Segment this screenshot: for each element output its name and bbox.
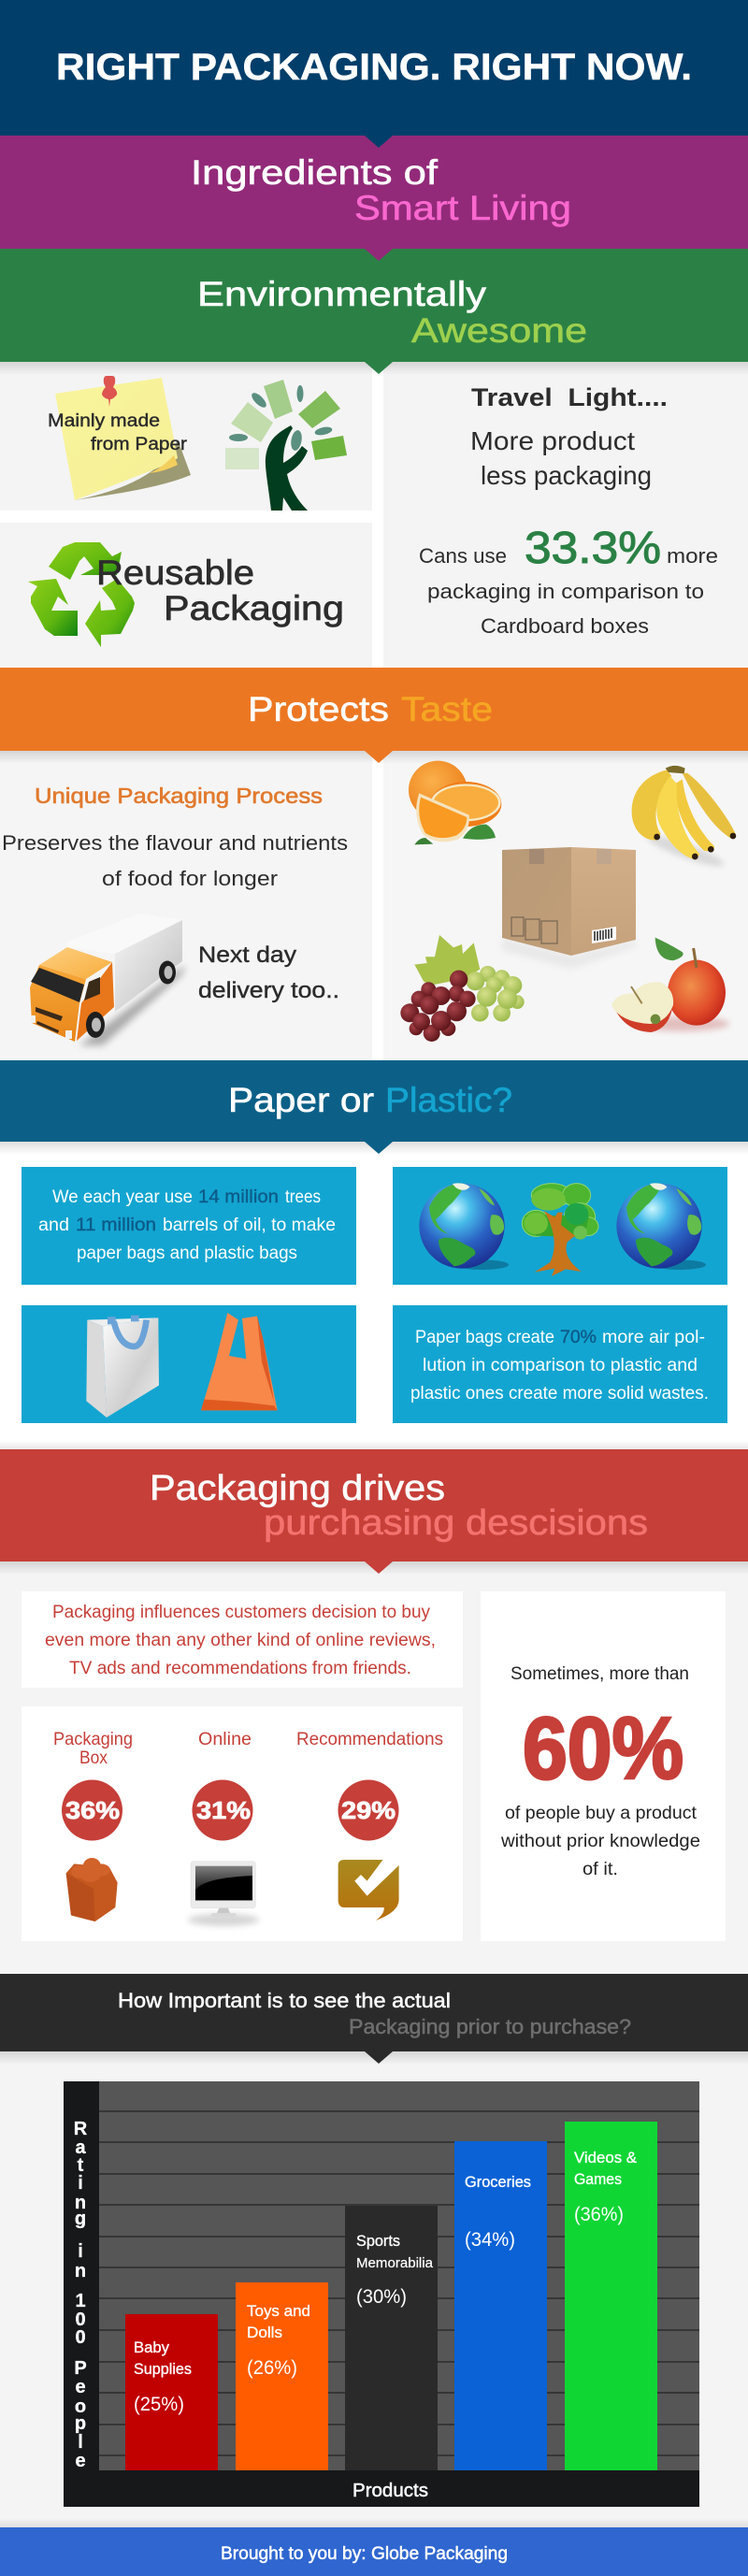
text: cans statistic: Cans use xyxy=(419,544,507,568)
text: next day delivery: Next day xyxy=(198,943,296,968)
arrow: red xyxy=(365,1561,393,1574)
y axis label: t xyxy=(78,2155,84,2176)
heading line 1: Ingredients of xyxy=(191,153,439,192)
bar: sports memorabilia xyxy=(345,2206,438,2470)
bar: baby supplies: Supplies xyxy=(134,2360,192,2378)
y axis label: p xyxy=(75,2413,86,2434)
x axis label: Products xyxy=(352,2481,428,2501)
bar: videos and games: (36%) xyxy=(574,2204,624,2225)
text: next day delivery: delivery too.. xyxy=(198,978,339,1003)
banner: how important xyxy=(0,1974,748,2051)
text: cans statistic: more xyxy=(667,544,718,568)
title: RIGHT PACKAGING. RIGHT NOW. xyxy=(56,47,692,88)
icon: bananas xyxy=(632,766,736,871)
icon: delivery truck xyxy=(30,914,185,1045)
text: preserves flavour xyxy=(2,831,348,890)
label: online: Online xyxy=(198,1730,252,1749)
panel: trees and oil: paper bags and plastic bags xyxy=(77,1244,297,1263)
y axis label: l xyxy=(78,2432,83,2453)
y axis label: n xyxy=(75,2193,86,2213)
text: cans statistic xyxy=(419,524,718,638)
heading word 2: Taste xyxy=(401,690,493,728)
text: more product less packaging xyxy=(470,426,652,490)
panel: influence text: Packaging influences customers decision to buy xyxy=(52,1603,430,1622)
stat: 36% xyxy=(62,1780,122,1840)
icon: globe right xyxy=(616,1183,706,1270)
panel: air pollution: plastic ones create more solid wastes. xyxy=(410,1384,709,1403)
panel: influence text: TV ads and recommendations from friends. xyxy=(69,1659,411,1678)
bar: groceries: Groceries xyxy=(465,2173,531,2191)
bar: toys and dolls: Dolls xyxy=(247,2324,282,2341)
bar: videos and games: Videos & xyxy=(574,2149,638,2166)
panel: 60 percent callout xyxy=(481,1591,726,1941)
y axis label: 0 xyxy=(75,2310,86,2330)
stat: 31% xyxy=(193,1780,252,1840)
icon: apples xyxy=(611,938,729,1032)
panel: 60 percent callout: Sometimes, more than xyxy=(511,1664,689,1684)
y axis label: 0 xyxy=(75,2327,86,2348)
footer: Brought to you by: Globe Packaging xyxy=(221,2544,508,2564)
panel: 60 percent callout: of people buy a product xyxy=(505,1804,698,1823)
text: more product less packaging: More product xyxy=(470,426,635,455)
icon: recycling arrows xyxy=(28,542,135,647)
icon: monitor xyxy=(188,1862,259,1926)
panel: trees and oil: We each year use xyxy=(52,1187,193,1207)
heading line 2: purchasing descisions xyxy=(264,1504,648,1543)
footer xyxy=(0,2527,748,2576)
panel: evergreen left top xyxy=(0,362,372,511)
text: unique packaging process: Unique Packaging Process xyxy=(35,784,323,808)
panel: air pollution: Paper bags create xyxy=(415,1328,554,1347)
text: reusable packaging: Reusable xyxy=(96,554,254,592)
icon: globe left xyxy=(419,1183,509,1270)
bar: sports memorabilia: Sports xyxy=(356,2232,400,2250)
y axis label: e xyxy=(75,2377,86,2397)
y axis label: R xyxy=(74,2119,88,2139)
panel: trees and oil: barrels of oil, to make xyxy=(163,1216,336,1235)
y axis label: P xyxy=(74,2358,87,2379)
heading line 2: Smart Living xyxy=(354,189,571,227)
panel: air pollution: lution in comparison to plastic and xyxy=(423,1356,698,1375)
text: mainly made from paper: from Paper xyxy=(91,435,188,454)
bar: toys and dolls xyxy=(236,2282,328,2470)
bar chart xyxy=(64,2081,699,2507)
number: 33.3%: 33.3% xyxy=(525,524,661,573)
banner: environmentally awesome xyxy=(0,249,748,362)
highlight: 70%: 70% xyxy=(560,1328,597,1347)
label: packaging box xyxy=(53,1730,133,1768)
panel: bags xyxy=(22,1305,356,1423)
y axis label: g xyxy=(75,2209,86,2229)
panel: influence percentages xyxy=(22,1706,463,1941)
stat: 31%: 31% xyxy=(196,1796,251,1824)
heading word 1: Paper or xyxy=(228,1081,374,1119)
panel: taste left xyxy=(0,751,372,1060)
icon: oranges xyxy=(409,761,501,844)
banner: protects taste xyxy=(0,668,748,751)
panel: travel light xyxy=(383,362,748,668)
stat: 36%: 36% xyxy=(65,1796,120,1824)
text: mainly made from paper: Mainly made xyxy=(48,411,160,431)
heading line 1: How Important is to see the actual xyxy=(118,1989,451,2012)
bar: groceries: (34%) xyxy=(465,2229,515,2251)
panel: influence text xyxy=(22,1591,463,1688)
label: packaging box: Packaging xyxy=(53,1730,133,1749)
stat: 29%: 29% xyxy=(341,1796,396,1824)
bar: baby supplies: Baby xyxy=(134,2339,169,2356)
text: more product less packaging: less packaging xyxy=(481,461,652,490)
bar: baby supplies xyxy=(125,2314,218,2470)
text: preserves flavour: of food for longer xyxy=(102,867,278,890)
panel: air pollution: more air pol- xyxy=(602,1328,705,1347)
highlight: 14 million: 14 million xyxy=(198,1187,279,1207)
panel: trees and oil: and xyxy=(38,1216,69,1235)
icon: grapes xyxy=(400,935,525,1042)
y axis label: i xyxy=(78,2173,83,2194)
bar: baby supplies: (25%) xyxy=(134,2394,184,2415)
highlight: 11 million: 11 million xyxy=(76,1216,156,1235)
y axis label: 1 xyxy=(75,2291,86,2311)
panel: taste right xyxy=(383,751,748,1060)
bar: toys and dolls: Toys and xyxy=(247,2302,310,2320)
banner: packaging drives purchasing decisions xyxy=(0,1449,748,1561)
bar: sports memorabilia: Memorabilia xyxy=(356,2255,434,2271)
panel: 60 percent callout: without prior knowledge xyxy=(500,1832,700,1851)
panel: lower background xyxy=(0,1561,748,2527)
heading line 1: Packaging drives xyxy=(150,1469,445,1508)
y axis label: n xyxy=(75,2261,86,2281)
banner: paper or plastic xyxy=(0,1060,748,1142)
panel: influence text: even more than any other kind of online reviews, xyxy=(45,1631,436,1650)
icon: plastic bag xyxy=(201,1313,278,1410)
panel: reusable packaging xyxy=(0,523,372,668)
icon: cardboard box xyxy=(502,847,636,969)
arrow: purple xyxy=(365,249,393,261)
arrow: navy xyxy=(365,136,393,148)
heading line 1: Environmentally xyxy=(197,275,487,313)
text: travel light: Travel Light.... xyxy=(471,383,668,411)
bar: videos and games xyxy=(565,2122,657,2470)
icon: check speech bubble xyxy=(338,1859,400,1921)
icon: paper bag xyxy=(86,1316,159,1418)
banner: title xyxy=(0,0,748,136)
text: preserves flavour: Preserves the flavour and nutrients xyxy=(2,831,348,855)
bar: sports memorabilia: (30%) xyxy=(356,2286,407,2308)
heading word 1: Protects xyxy=(248,690,389,728)
bar: groceries xyxy=(454,2141,547,2470)
heading word 2: Plastic? xyxy=(385,1081,512,1119)
panel: trees and oil xyxy=(22,1167,356,1285)
y axis label: i xyxy=(78,2241,83,2262)
bar: toys and dolls: (26%) xyxy=(247,2357,297,2379)
text: mainly made from paper xyxy=(48,411,188,454)
panel: trees and oil: trees xyxy=(285,1187,321,1207)
text: cans statistic: Cardboard boxes xyxy=(481,614,649,638)
arrow: orange xyxy=(365,751,393,763)
panel: air pollution xyxy=(393,1305,727,1423)
text: reusable packaging: Packaging xyxy=(164,589,344,627)
banner: ingredients of smart living xyxy=(0,136,748,249)
heading line 2: Awesome xyxy=(411,311,587,350)
y axis label: o xyxy=(75,2396,86,2417)
icon: gift box xyxy=(66,1858,118,1921)
text: next day delivery xyxy=(198,943,339,1003)
arrow: blue xyxy=(365,1142,393,1154)
text: reusable packaging xyxy=(96,554,344,627)
y axis label: a xyxy=(75,2137,86,2158)
arrow: dark xyxy=(365,2051,393,2064)
number: 60%: 60% xyxy=(523,1699,683,1797)
panel: 60 percent callout: of it. xyxy=(583,1860,618,1879)
icon: tree xyxy=(522,1184,598,1276)
bar: videos and games: Games xyxy=(574,2170,622,2188)
icon: paper tree xyxy=(225,380,347,511)
panel: globes and tree xyxy=(393,1167,727,1285)
y axis label xyxy=(74,2119,88,2471)
icon: sticky note with pin xyxy=(55,376,191,500)
label: packaging box: Box xyxy=(79,1749,108,1768)
stat: 29% xyxy=(338,1780,398,1840)
heading line 2: Packaging prior to purchase? xyxy=(349,2015,631,2038)
y axis label: e xyxy=(75,2451,86,2471)
text: cans statistic: packaging in comparison to xyxy=(427,580,704,603)
label: recommendations: Recommendations xyxy=(296,1730,443,1749)
arrow: green xyxy=(365,362,393,374)
